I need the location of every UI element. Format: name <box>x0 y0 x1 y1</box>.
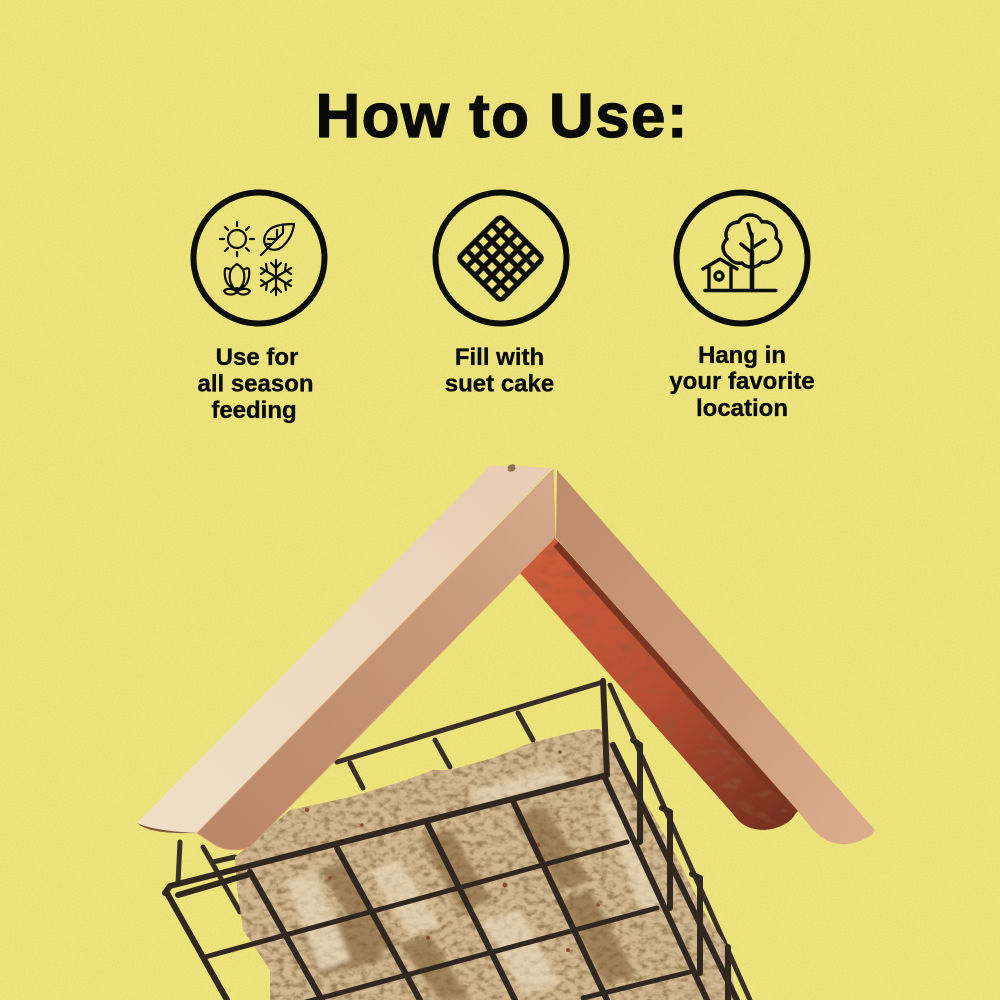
copper roof: left front face <box>197 470 555 850</box>
label: step 2: suet cake <box>445 370 554 398</box>
suet cake <box>235 729 737 1000</box>
title: How to Use: <box>316 82 688 151</box>
label: step 1: feeding <box>211 397 297 424</box>
wire cage: front <box>165 681 707 1000</box>
label: step 2 <box>445 344 554 398</box>
label: step 3: location <box>696 395 788 422</box>
step 3: hang in your favorite location <box>669 192 815 422</box>
wire cage: side hooks <box>613 740 737 1000</box>
icon: seasons <box>194 192 324 324</box>
wire cage: rear <box>178 682 750 1000</box>
icon: tree and bird house <box>676 192 808 324</box>
label: step 1 <box>197 344 314 424</box>
suet cake shading <box>285 765 665 1000</box>
copper roof: right panel <box>556 470 875 844</box>
label: step 2: Fill with <box>455 344 544 371</box>
label: step 3: your favorite <box>669 368 815 395</box>
copper roof: red underside <box>520 538 797 830</box>
icon: wire grid <box>436 192 566 324</box>
suet feeder <box>137 464 875 1000</box>
label: step 1: all season <box>197 370 314 398</box>
step 2: fill with suet cake <box>436 192 566 398</box>
label: step 3: Hang in <box>698 342 786 369</box>
suet cake specks <box>305 750 600 952</box>
label: step 3 <box>669 342 815 422</box>
step 1: all season feeding <box>194 192 324 424</box>
copper roof: left top plane <box>137 464 553 833</box>
label: step 1: Use for <box>216 344 298 371</box>
